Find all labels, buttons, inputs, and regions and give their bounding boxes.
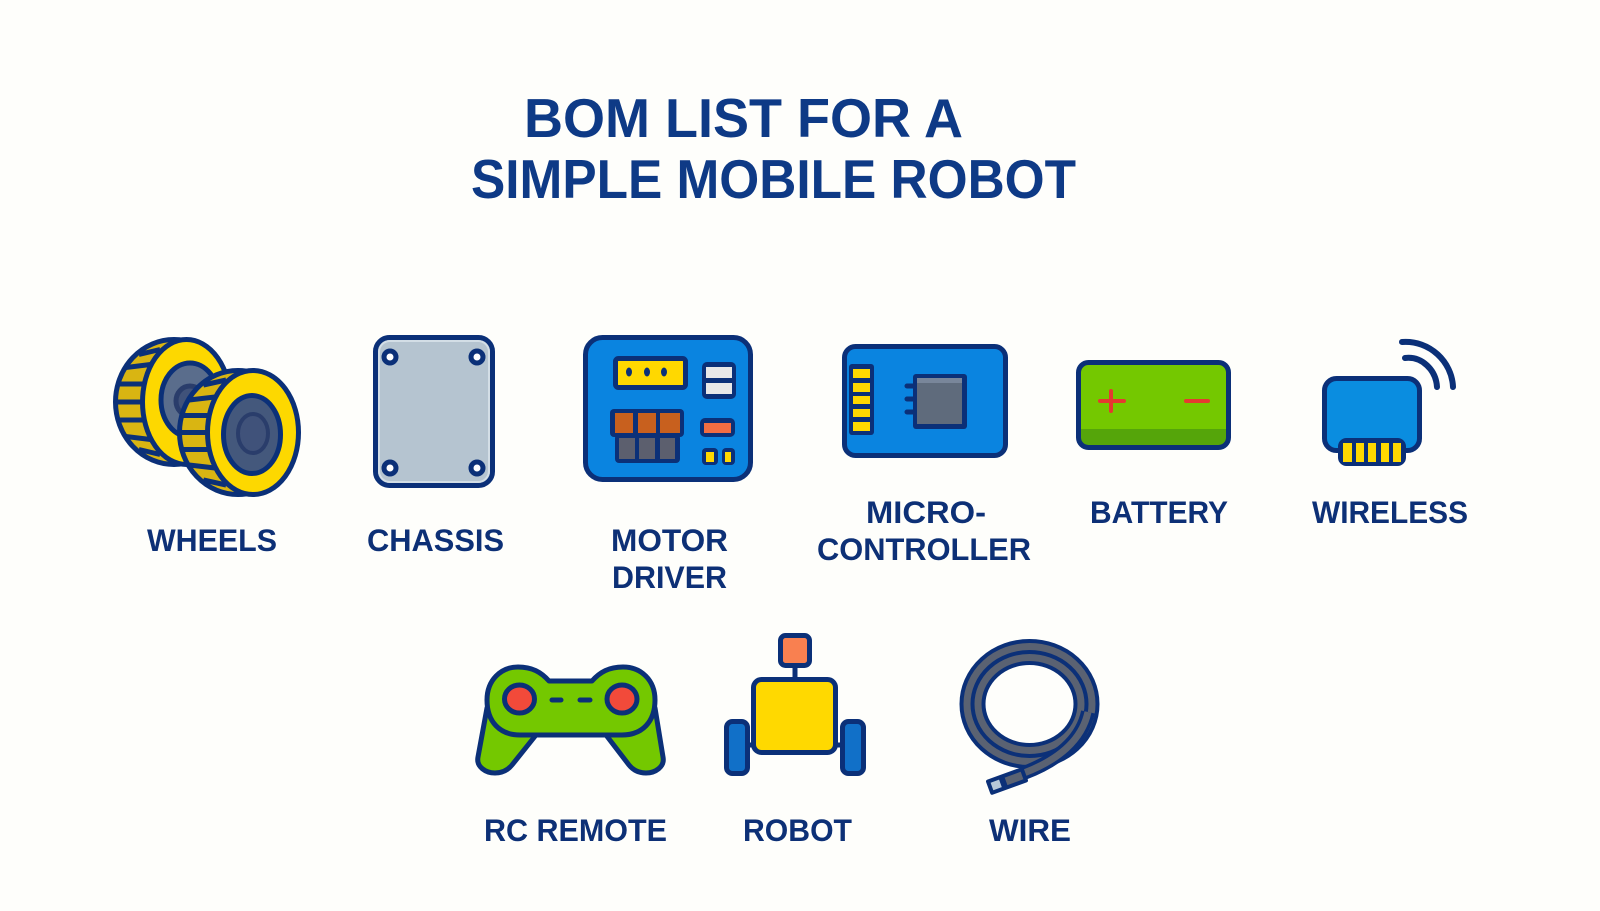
icon: motor driver [586,338,750,480]
label: motor driver: MOTOR [611,522,728,558]
icon: rc remote [478,667,663,773]
label: microcontroller: CONTROLLER [817,531,1031,567]
icon: wireless module [1324,342,1453,464]
title: SIMPLE MOBILE ROBOT [471,148,1076,210]
label: battery: BATTERY [1090,494,1228,530]
title: BOM LIST FOR A [524,87,963,149]
icon: chassis [376,338,492,486]
label: microcontroller [817,494,1031,567]
icon: microcontroller [844,346,1006,456]
label: rc remote: RC REMOTE [484,812,667,848]
label: wire: WIRE [989,812,1071,848]
label: robot: ROBOT [743,812,852,848]
label: wireless: WIRELESS [1312,494,1468,530]
icon: robot [726,636,864,774]
label: microcontroller: MICRO- [866,494,986,530]
label: wheels: WHEELS [147,522,277,558]
title [471,87,1076,210]
label: chassis: CHASSIS [367,522,504,558]
label: motor driver [611,522,728,595]
icon: wheels [116,340,298,494]
icon: wire coil [972,652,1088,795]
icon: battery [1078,362,1228,448]
label: motor driver: DRIVER [612,559,727,595]
